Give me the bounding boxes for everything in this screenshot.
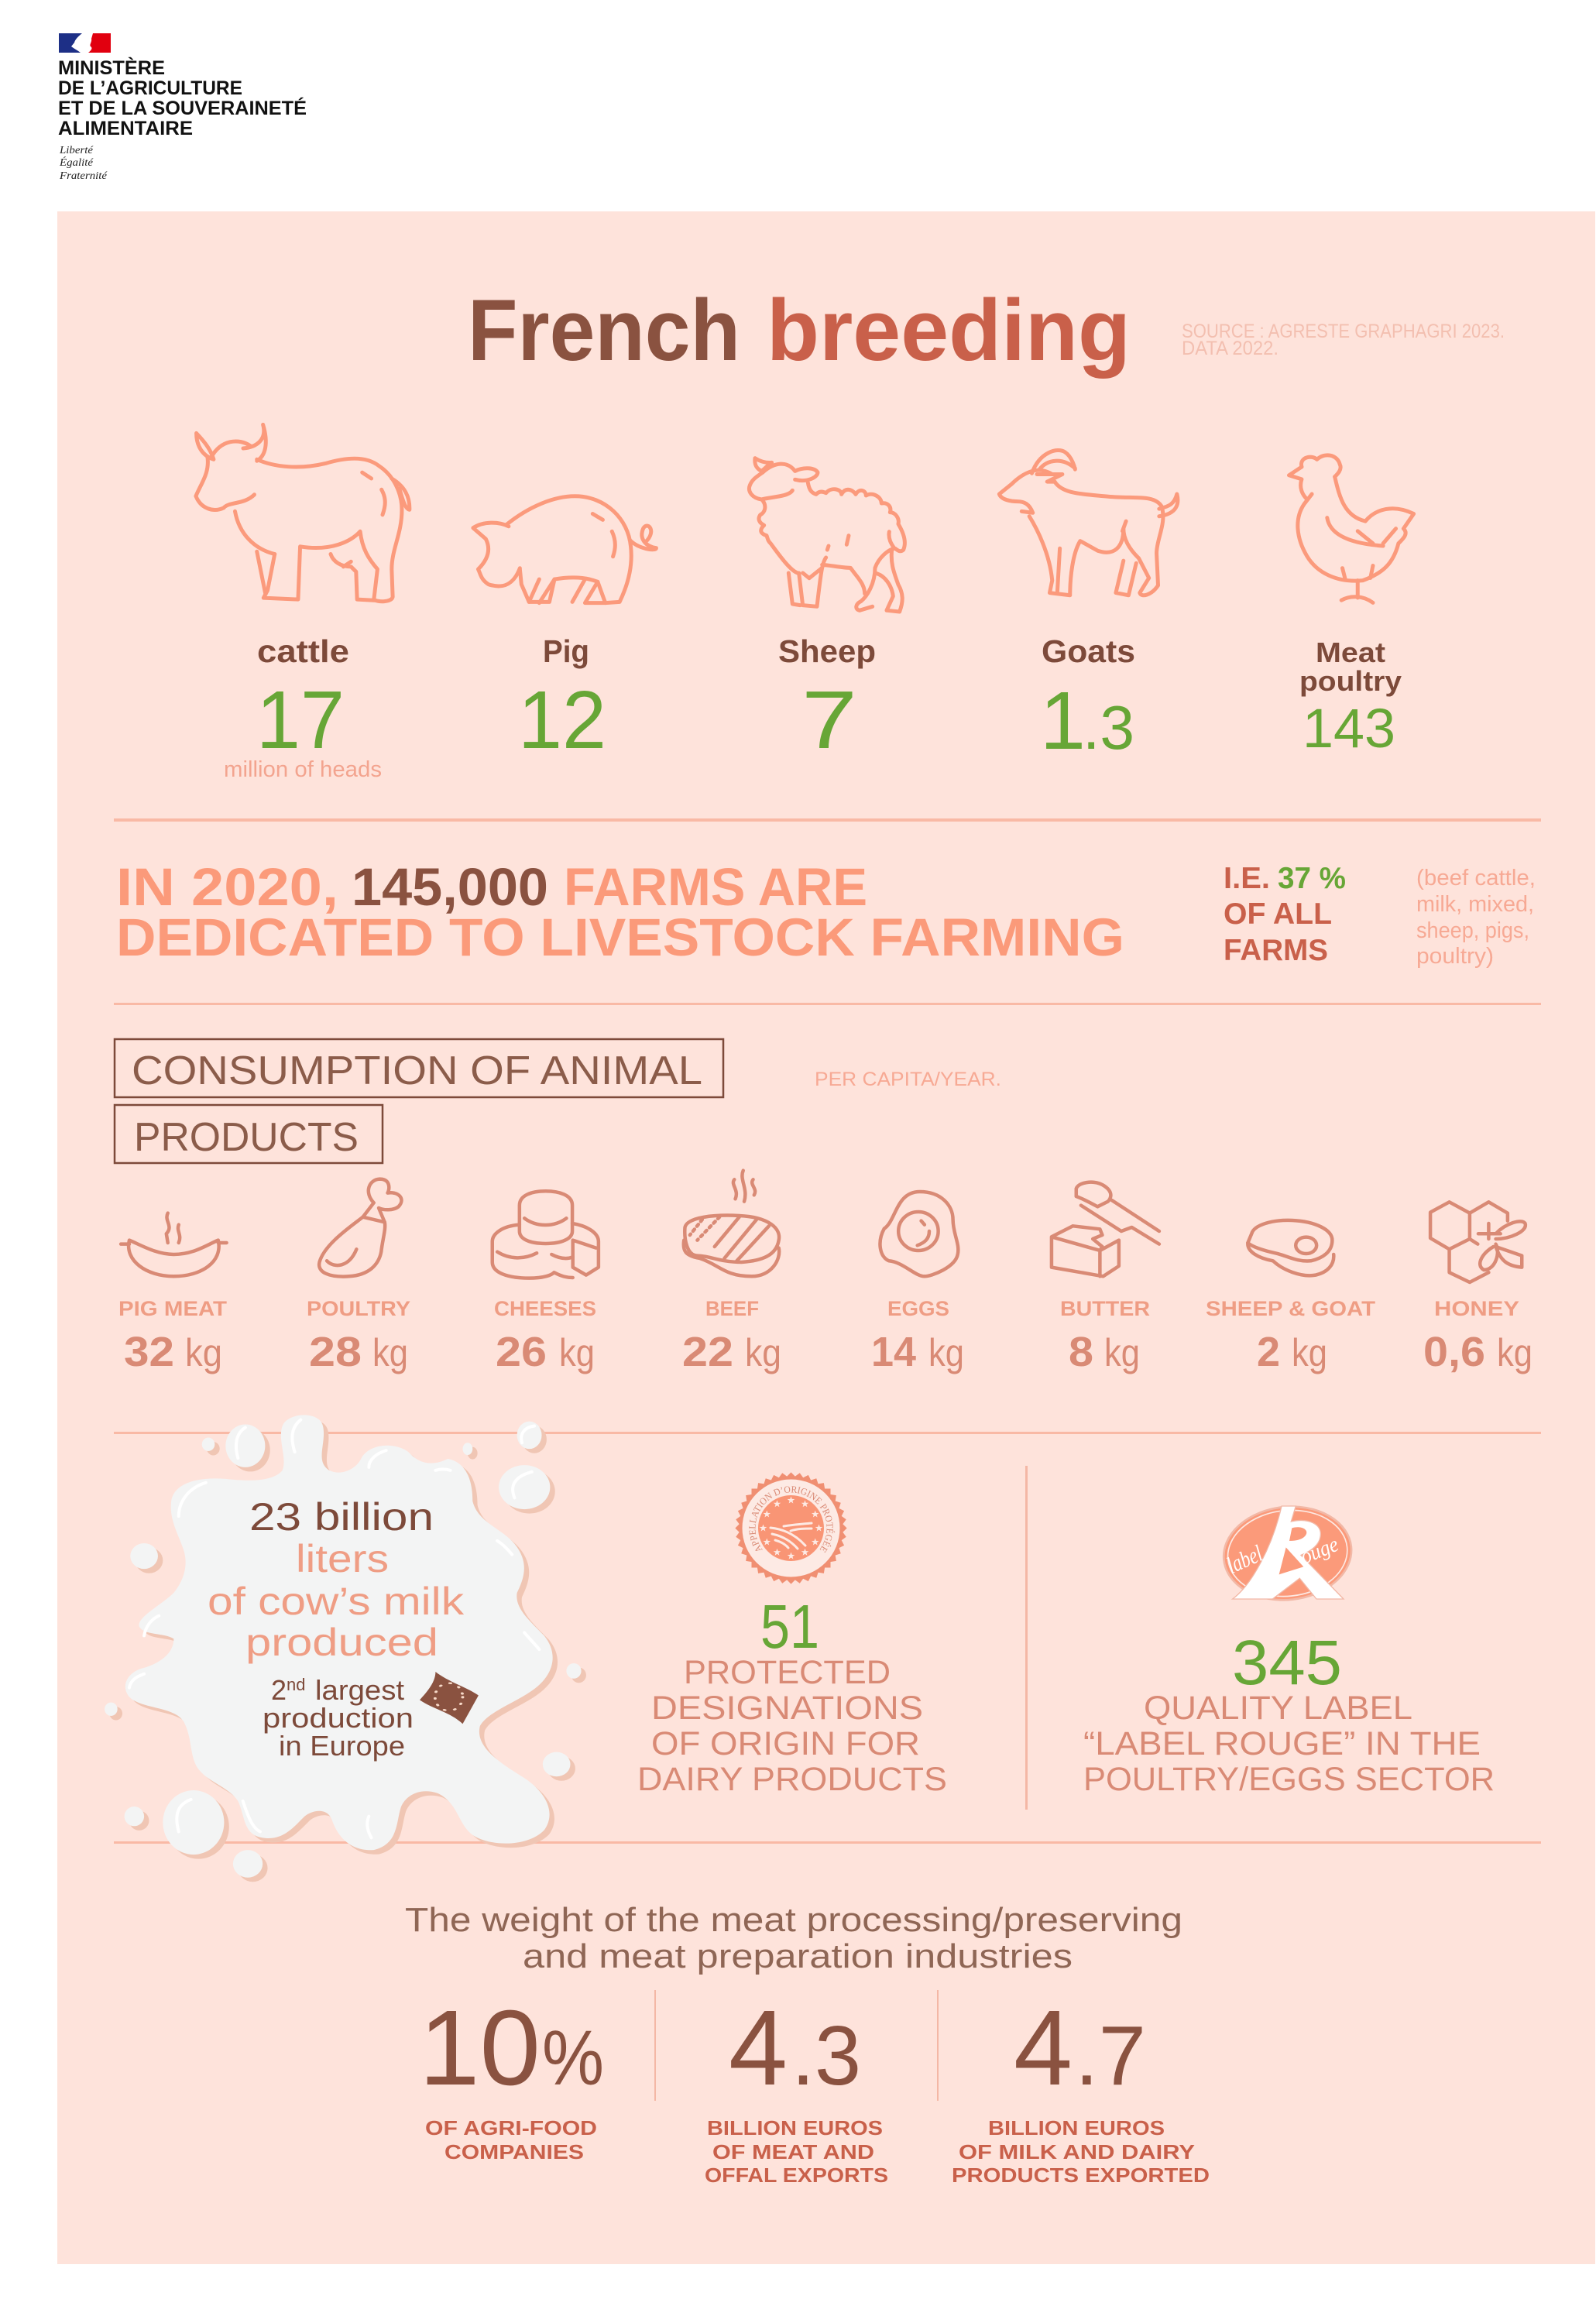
farm types note: poultry) bbox=[1416, 944, 1494, 969]
label word: label bbox=[1223, 1540, 1266, 1579]
icon: Label Rouge logo bbox=[1219, 1501, 1356, 1606]
icon: butter bbox=[1052, 1182, 1159, 1276]
logo: ministry of agriculture bbox=[58, 33, 307, 182]
icon: European flag bbox=[420, 1672, 479, 1724]
ministry name: MINISTÈRE bbox=[58, 57, 165, 79]
stat: 10 percent: COMPANIES bbox=[444, 2140, 584, 2163]
pig meat stat: PIG MEAT bbox=[118, 1297, 228, 1320]
icon: chicken bbox=[1289, 455, 1414, 602]
Label Rouge stat bbox=[1083, 1628, 1495, 1798]
icon: goat bbox=[999, 451, 1178, 595]
ministry name bbox=[58, 57, 307, 139]
beef stat: 22 bbox=[682, 1329, 733, 1375]
source note bbox=[1182, 321, 1505, 359]
beef stat bbox=[682, 1297, 781, 1375]
icon: sheep bbox=[749, 458, 904, 612]
goats stat: Goats bbox=[1042, 633, 1135, 669]
milk production text: produced bbox=[245, 1621, 438, 1664]
stat: meat exports: OF MEAT AND bbox=[712, 2140, 874, 2163]
milk splash bbox=[105, 1415, 586, 1882]
eggs stat: 14 bbox=[871, 1329, 916, 1375]
cattle stat: cattle bbox=[257, 633, 349, 669]
sheep stat: Sheep bbox=[778, 633, 876, 669]
heading: consumption: CONSUMPTION OF ANIMAL bbox=[132, 1048, 702, 1093]
stat: meat exports bbox=[705, 1988, 888, 2187]
icon: honey and bee bbox=[1430, 1202, 1526, 1282]
farm types note: (beef cattle, bbox=[1416, 866, 1536, 890]
sheep and goat stat: SHEEP & GOAT bbox=[1206, 1297, 1376, 1320]
PDO stat: OF ORIGIN FOR bbox=[651, 1725, 920, 1762]
butter stat bbox=[1060, 1297, 1150, 1375]
pig stat: 12 bbox=[518, 674, 606, 766]
pig meat stat: kg bbox=[185, 1331, 222, 1374]
badge toothed edge bbox=[735, 1472, 847, 1584]
honey stat: HONEY bbox=[1434, 1297, 1519, 1320]
Label Rouge stat: “LABEL ROUGE” IN THE bbox=[1083, 1725, 1481, 1762]
icon: French flag bbox=[59, 33, 111, 53]
Label Rouge stat: 345 bbox=[1232, 1628, 1342, 1698]
milk production text: largest bbox=[315, 1674, 404, 1706]
goats stat: .3 bbox=[1083, 693, 1134, 762]
sheep and goat stat bbox=[1206, 1297, 1376, 1375]
stat: dairy exports bbox=[952, 1988, 1210, 2187]
farm types note bbox=[1416, 866, 1536, 969]
share of farms: FARMS bbox=[1224, 934, 1328, 967]
pig stat: Pig bbox=[543, 633, 589, 669]
headline: farms: FARMS ARE bbox=[564, 857, 867, 917]
motto bbox=[59, 145, 108, 182]
PDO stat: PROTECTED bbox=[684, 1654, 891, 1691]
Label Rouge stat: POULTRY/EGGS SECTOR bbox=[1083, 1761, 1495, 1798]
stat: dairy exports: 4 bbox=[1014, 1988, 1073, 2108]
milk production text: in Europe bbox=[279, 1730, 405, 1762]
share of farms: 37 % bbox=[1278, 862, 1346, 895]
sheep stat bbox=[778, 633, 876, 766]
icon: pig bbox=[473, 496, 656, 603]
Label Rouge stat: QUALITY LABEL bbox=[1144, 1690, 1412, 1727]
honey stat bbox=[1423, 1297, 1533, 1375]
sheep and goat stat: 2 bbox=[1257, 1329, 1280, 1375]
milk production text: 23 billion bbox=[249, 1495, 434, 1539]
headline: farms: IN 2020, bbox=[116, 857, 338, 917]
farm types note: sheep, pigs, bbox=[1416, 918, 1529, 943]
stat: meat exports: BILLION EUROS bbox=[707, 2116, 883, 2139]
cheeses stat bbox=[494, 1297, 596, 1375]
stat: dairy exports: BILLION EUROS bbox=[988, 2116, 1165, 2139]
cheeses stat: 26 bbox=[496, 1329, 547, 1375]
motto: Égalité bbox=[59, 156, 94, 169]
butter stat: BUTTER bbox=[1060, 1297, 1150, 1320]
farm types note: milk, mixed, bbox=[1416, 892, 1534, 917]
butter stat: 8 bbox=[1069, 1329, 1093, 1375]
pig meat stat: 32 bbox=[124, 1329, 174, 1375]
source note: SOURCE : AGRESTE GRAPHAGRI 2023. bbox=[1182, 321, 1505, 342]
milk highlights bbox=[129, 1420, 539, 1837]
icon: egg bbox=[880, 1192, 958, 1276]
title: French bbox=[468, 282, 740, 379]
headline: farms: DEDICATED TO LIVESTOCK FARMING bbox=[116, 908, 1124, 967]
sheep and goat stat: kg bbox=[1292, 1331, 1327, 1374]
pig meat stat bbox=[118, 1297, 228, 1375]
stat: dairy exports: PRODUCTS EXPORTED bbox=[952, 2163, 1210, 2187]
PDO stat: DAIRY PRODUCTS bbox=[637, 1761, 947, 1798]
PDO stat bbox=[637, 1592, 947, 1798]
motto: Liberté bbox=[59, 145, 94, 156]
motto: Fraternité bbox=[59, 170, 108, 182]
poultry stat bbox=[307, 1297, 410, 1375]
share of farms: I.E. bbox=[1224, 862, 1270, 895]
heading: consumption bbox=[115, 1039, 723, 1163]
eggs stat: kg bbox=[928, 1331, 964, 1374]
icon: steak bbox=[684, 1171, 779, 1276]
icon: cheeses bbox=[493, 1191, 599, 1278]
stat: meat exports: .3 bbox=[791, 2009, 861, 2103]
heading: meat industries: The weight of the meat processing/preserving bbox=[405, 1901, 1182, 1939]
milk body bbox=[105, 1415, 582, 1878]
heading: meat industries: and meat preparation industries bbox=[523, 1937, 1073, 1975]
sheep stat: 7 bbox=[801, 674, 857, 766]
icon: cow bbox=[196, 424, 410, 602]
stat: meat exports: OFFAL EXPORTS bbox=[705, 2163, 888, 2187]
stat: 10 percent: OF AGRI-FOOD bbox=[425, 2116, 597, 2139]
source note: DATA 2022. bbox=[1182, 338, 1279, 359]
pig stat bbox=[518, 633, 606, 766]
icon: sausage bbox=[121, 1213, 227, 1276]
butter stat: kg bbox=[1104, 1331, 1140, 1374]
meat poultry stat: Meat bbox=[1316, 637, 1385, 668]
milk production text bbox=[208, 1495, 465, 1762]
stat: 10 percent: 10 bbox=[419, 1988, 541, 2108]
milk production text: of cow’s milk bbox=[208, 1580, 465, 1623]
poultry stat: POULTRY bbox=[307, 1297, 410, 1320]
title bbox=[468, 282, 1131, 379]
headline: farms: 145,000 bbox=[352, 857, 548, 917]
honey stat: kg bbox=[1497, 1331, 1533, 1374]
PDO stat: 51 bbox=[760, 1592, 819, 1661]
PDO stat: DESIGNATIONS bbox=[651, 1690, 923, 1727]
badge ring text: APPELLATION D’ORIGINE PROTÉGÉE bbox=[749, 1486, 835, 1553]
milk production text: 2 bbox=[271, 1674, 287, 1706]
ministry name: ALIMENTAIRE bbox=[58, 118, 193, 139]
stat: 10 percent: % bbox=[542, 2015, 604, 2102]
goats stat: 1 bbox=[1040, 675, 1086, 767]
heading: meat industries bbox=[405, 1901, 1182, 1975]
cattle stat: 17 bbox=[256, 674, 345, 766]
poultry stat: kg bbox=[372, 1331, 408, 1374]
milk production text: nd bbox=[287, 1675, 305, 1694]
meat poultry stat bbox=[1299, 637, 1402, 760]
stat: 10 percent bbox=[419, 1988, 604, 2163]
cattle stat: million of heads bbox=[224, 757, 382, 782]
stat: dairy exports: OF MILK AND DAIRY bbox=[959, 2140, 1195, 2163]
eggs stat bbox=[871, 1297, 964, 1375]
goats stat bbox=[1040, 633, 1135, 767]
poultry stat: 28 bbox=[309, 1329, 362, 1375]
eggs stat: EGGS bbox=[887, 1297, 949, 1320]
meat poultry stat: poultry bbox=[1299, 665, 1402, 697]
icon: drumstick bbox=[319, 1179, 401, 1277]
cattle stat bbox=[224, 633, 382, 782]
cheeses stat: kg bbox=[559, 1331, 595, 1374]
badge stars bbox=[760, 1496, 822, 1560]
headline: farms bbox=[116, 857, 1124, 967]
title: breeding bbox=[767, 282, 1131, 379]
icon: lamb chop bbox=[1248, 1220, 1333, 1275]
ministry name: ET DE LA SOUVERAINETÉ bbox=[58, 97, 307, 119]
per capita note: PER CAPITA/YEAR. bbox=[815, 1069, 1001, 1090]
beef stat: kg bbox=[745, 1331, 781, 1374]
badge hills bbox=[771, 1523, 812, 1549]
honey stat: 0,6 bbox=[1423, 1329, 1485, 1375]
stat: dairy exports: .7 bbox=[1075, 2009, 1146, 2103]
beef stat: BEEF bbox=[705, 1297, 759, 1320]
icon: AOP badge bbox=[736, 1473, 847, 1584]
stat: meat exports: 4 bbox=[729, 1988, 788, 2108]
rouge word: ouge bbox=[1297, 1532, 1342, 1569]
cheeses stat: CHEESES bbox=[494, 1297, 596, 1320]
heading: consumption: PRODUCTS bbox=[134, 1115, 359, 1160]
milk production text: production bbox=[263, 1702, 414, 1734]
milk shadow bbox=[109, 1419, 586, 1882]
share of farms: OF ALL bbox=[1224, 897, 1332, 931]
share of farms bbox=[1224, 862, 1346, 967]
milk production text: liters bbox=[296, 1537, 389, 1580]
ministry name: DE L’AGRICULTURE bbox=[58, 77, 242, 99]
meat poultry stat: 143 bbox=[1303, 698, 1395, 760]
